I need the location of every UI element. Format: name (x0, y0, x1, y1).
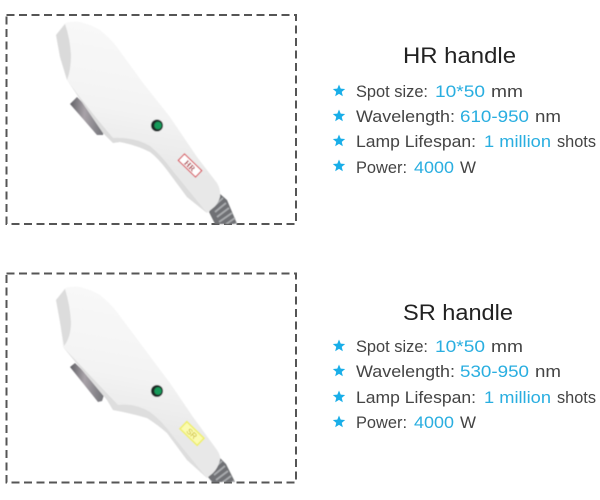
HR label: HR (182, 158, 197, 173)
icon: green button (151, 385, 163, 397)
SR label (180, 422, 204, 445)
spec: power: 4000 (414, 159, 454, 177)
spec: lamp lifespan: shots (557, 133, 596, 151)
panel: HR handle image frame (6, 15, 296, 224)
spec: wavelength: Wavelength: (356, 363, 455, 381)
heading: SR handle: SR handle (403, 300, 513, 325)
handpiece body (56, 22, 220, 213)
spec: lamp lifespan: 1 million (484, 389, 551, 407)
handpiece lamp window (70, 97, 105, 135)
icon: SR handpiece (56, 287, 236, 488)
handpiece cable (208, 458, 236, 483)
heading: HR handle: HR handle (403, 43, 516, 68)
handpiece body (56, 287, 220, 478)
list: HR handle specifications (333, 83, 596, 177)
spec: wavelength: 610-950 (460, 108, 529, 126)
handpiece front face (56, 289, 71, 346)
spec: wavelength: nm (535, 108, 561, 126)
spec: lamp lifespan: Lamp Lifespan: (356, 389, 476, 407)
spec: lamp lifespan: shots (557, 389, 596, 407)
spec: power: Power: (356, 159, 407, 177)
spec: wavelength: 530-950 (460, 363, 529, 381)
spec: wavelength: nm (535, 363, 561, 381)
spec: spot size (333, 83, 523, 101)
spec: wavelength (333, 363, 561, 381)
spec: spot size: 10*50 (435, 83, 485, 101)
spec: lamp lifespan (333, 133, 596, 151)
spec: spot size: Spot size: (356, 338, 428, 356)
spec: power: Power: (356, 414, 407, 432)
spec: power (333, 414, 476, 432)
spec: spot size: mm (491, 338, 523, 356)
spec: lamp lifespan: Lamp Lifespan: (356, 133, 476, 151)
spec: lamp lifespan: 1 million (484, 133, 551, 151)
handpiece front face (56, 24, 71, 80)
handpiece cable (208, 194, 238, 225)
icon: green button (151, 120, 163, 132)
icon: HR handpiece (56, 22, 238, 230)
panel: SR handle image frame (6, 274, 296, 482)
spec: wavelength: Wavelength: (356, 108, 455, 126)
HR label (178, 154, 202, 177)
spec: spot size: 10*50 (435, 338, 485, 356)
spec: spot size: mm (491, 83, 523, 101)
handpiece lower edge shading (63, 347, 207, 478)
handpiece lower edge shading (67, 80, 207, 213)
spec: power (333, 159, 476, 177)
spec: power: 4000 (414, 414, 454, 432)
spec: spot size (333, 338, 523, 356)
spec: spot size: Spot size: (356, 83, 428, 101)
spec: power: W (460, 414, 476, 432)
spec: power: W (460, 159, 476, 177)
list: SR handle specifications (333, 338, 596, 432)
spec: lamp lifespan (333, 389, 596, 407)
handpiece lamp window (70, 363, 105, 402)
spec: wavelength (333, 108, 561, 126)
SR label: SR (185, 427, 199, 441)
